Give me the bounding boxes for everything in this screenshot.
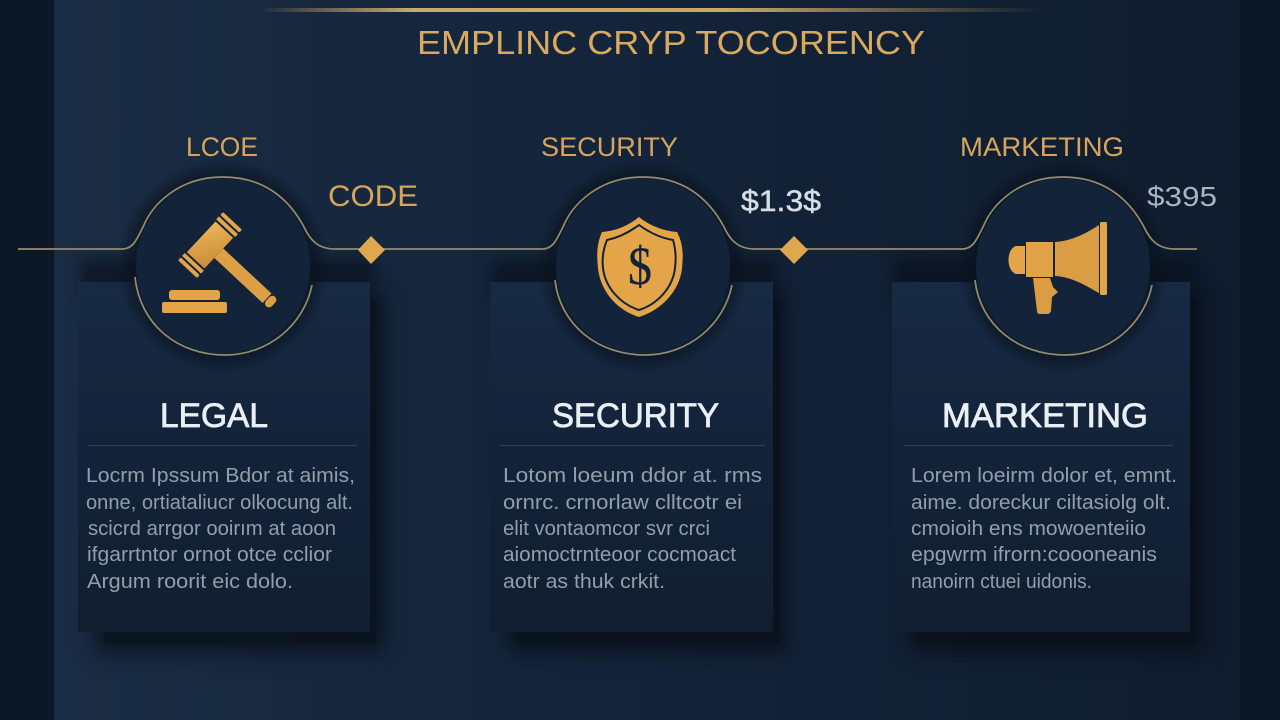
security body text: aotr as thuk crkit. [503,571,665,593]
marketing divider [904,445,1173,446]
marketing body text [911,465,1177,593]
legal body text: Locrm Ipssum Bdor at aimis, [86,465,355,487]
connector diamond 1 [358,236,385,264]
panel: legal card [78,282,370,632]
panel: marketing card [892,282,1190,632]
marketing heading: MARKETING [942,397,1148,435]
security heading: SECURITY [552,397,719,435]
security body text: aiomoctrnteoor cocmoact [503,544,736,566]
legal body text: scicrd arrgor ooirım at aoon [88,518,336,540]
security body text: ornrc. crnorlaw clltcotr ei [503,492,742,514]
marketing body text: cmoioih ens mowoenteiio [911,518,1146,540]
circle backgrounds [136,178,1150,354]
timeline connector line with circle outlines [18,177,1197,355]
title: EMPLINC CRYP TOCORENCY [417,24,925,61]
security body text: elit vontaomcor svr crci [503,518,710,540]
legal body text: onne, ortiataliucr olkocung alt. [86,492,353,514]
security body text [503,465,762,593]
legal divider [88,445,357,446]
top label: security: SECURITY [541,132,678,162]
marketing body text: Lorem loeirm dolor et, emnt. [911,465,1177,487]
security divider [500,445,765,446]
top label: marketing: MARKETING [960,132,1124,162]
callout: code: CODE [328,180,418,213]
circle soft halos [117,159,1169,373]
marketing body text: epgwrm ifrorn:coooneanis [911,544,1157,566]
callout: amount 2: $395 [1147,181,1217,212]
legal body text: Argum roorit eic dolo. [87,571,293,593]
legal body text: ifgarrtntor ornot otce cclior [87,544,332,566]
top decorative gold rule [258,8,1043,12]
icon: shield with dollar [597,217,683,317]
icon: gavel [162,212,296,328]
callout: amount 1: $1.3$ [741,185,821,218]
security body text: Lotom loeum ddor at. rms [503,465,762,487]
marketing body text: nanoirn ctuei uidonis. [911,571,1092,593]
icon: megaphone [1008,222,1107,314]
marketing body text: aime. doreckur ciltasiolg olt. [911,492,1171,514]
connector diamond 2 [780,236,808,264]
icon: shield with dollar: $ [628,236,652,296]
panel: security card [490,282,773,632]
legal body text [86,465,355,593]
top label: legal: LCOE [186,132,258,162]
legal heading: LEGAL [160,397,268,435]
